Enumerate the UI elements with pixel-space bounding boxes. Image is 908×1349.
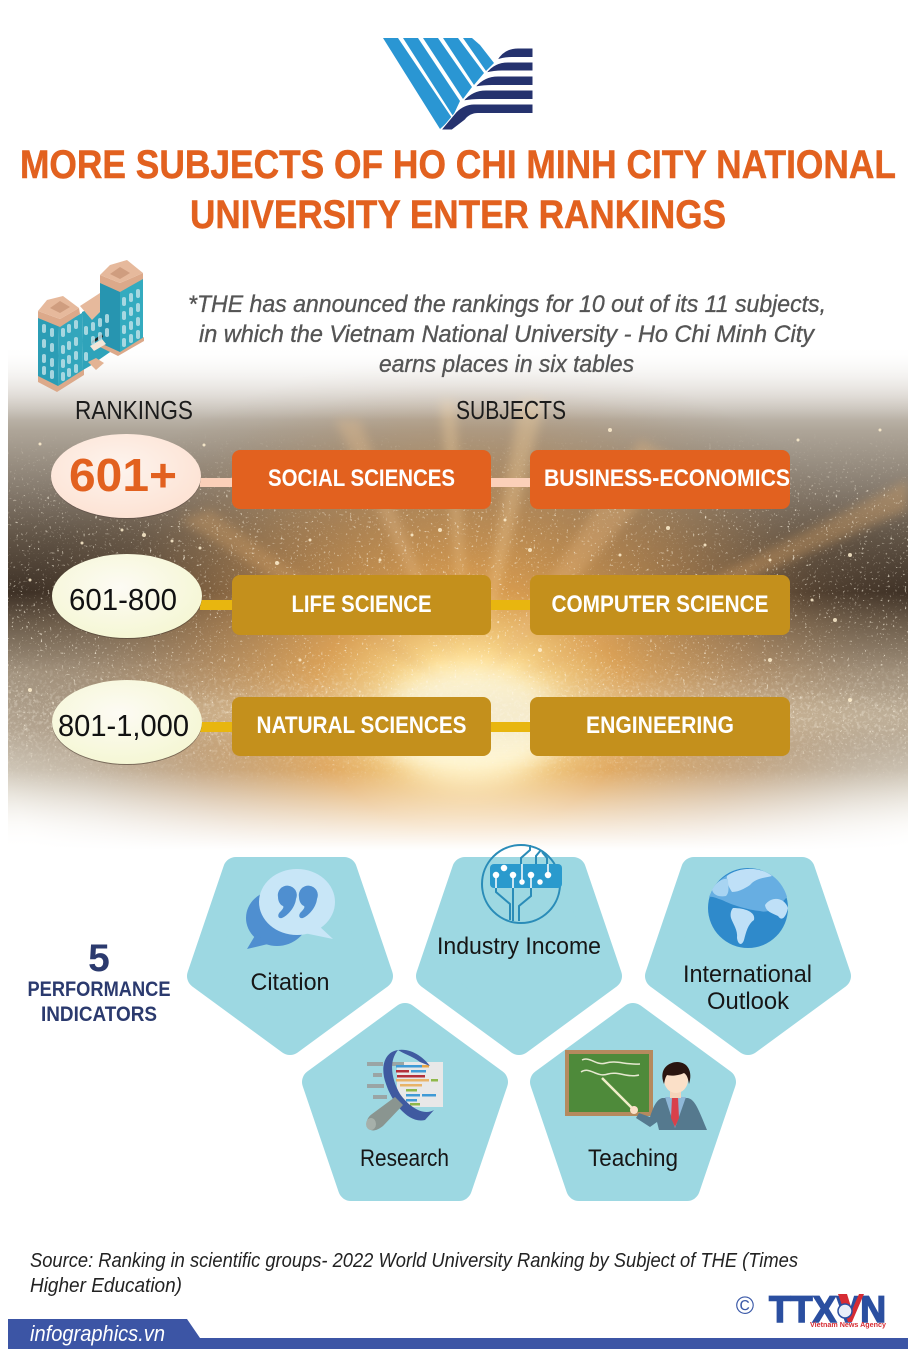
- heading: 5 performance indicators: INDICATORS: [41, 1003, 157, 1026]
- row: 601+: 601+: [69, 449, 177, 501]
- panel: research: Research: [360, 1145, 449, 1172]
- source note: Source: Ranking in scientific groups- 2022 World University Ranking by Subject of THE (Times: [30, 1250, 798, 1272]
- background: golden light burst: [8, 345, 908, 850]
- row: 601+: [51, 434, 790, 519]
- copyright symbol: ©: [736, 1292, 755, 1320]
- heading: 5 performance indicators: 5: [88, 937, 110, 980]
- footer bar: [8, 1319, 908, 1349]
- panel: industry income: Industry Income: [437, 933, 601, 960]
- heading: 5 performance indicators: [28, 937, 170, 1026]
- column heading: subjects: SUBJECTS: [456, 395, 566, 425]
- icon: globe: [708, 868, 788, 948]
- icon: teacher at chalkboard: [565, 1050, 707, 1130]
- panel: international outlook: Outlook: [707, 988, 790, 1015]
- panel: teaching: Teaching: [588, 1145, 678, 1172]
- icon: magnifier over code: [366, 1050, 443, 1130]
- panel: citation: [200, 869, 380, 1042]
- row: 601+: SOCIAL SCIENCES: [268, 465, 455, 492]
- panel: teaching: [543, 1016, 723, 1188]
- source note: Higher Education): [30, 1275, 182, 1297]
- intro text: in which the Vietnam National University - Ho Chi Minh City: [199, 321, 816, 348]
- logo: Vietnam National University: [383, 38, 533, 130]
- panel: international outlook: [658, 868, 838, 1042]
- icon: circuit globe: [482, 845, 562, 923]
- intro text: *THE has announced the rankings for 10 out of its 11 subjects,: [188, 291, 826, 318]
- row: 601-800: 601-800: [69, 582, 177, 617]
- title: UNIVERSITY ENTER RANKINGS: [190, 193, 726, 237]
- row: 801-1,000: ENGINEERING: [586, 712, 734, 739]
- row: 801-1,000: NATURAL SCIENCES: [256, 712, 466, 739]
- panel: research: [315, 1016, 495, 1188]
- panel: citation: Citation: [250, 969, 330, 996]
- footer bar: infographics.vn: [30, 1321, 165, 1346]
- TTXVN logo: TTXVN: [769, 1289, 886, 1330]
- title: [20, 143, 896, 237]
- panel: industry income: [429, 845, 609, 1042]
- source note: [30, 1250, 798, 1297]
- row: 801-1,000: [52, 680, 790, 765]
- icon: university building: [38, 260, 144, 392]
- panel: international outlook: International: [683, 961, 812, 988]
- TTXVN logo: Vietnam News Agency: [810, 1320, 887, 1329]
- intro text: earns places in six tables: [379, 351, 634, 378]
- row: 601-800: LIFE SCIENCE: [292, 591, 432, 618]
- icon: speech bubbles with quote marks: [246, 869, 335, 949]
- intro text: [188, 291, 826, 378]
- row: 801-1,000: 801-1,000: [58, 708, 189, 743]
- column heading: rankings: RANKINGS: [75, 395, 193, 425]
- row: 601-800: COMPUTER SCIENCE: [552, 591, 768, 618]
- row: 601+: BUSINESS-ECONOMICS: [544, 465, 790, 492]
- row: 601-800: [52, 554, 790, 639]
- heading: 5 performance indicators: PERFORMANCE: [28, 978, 170, 1001]
